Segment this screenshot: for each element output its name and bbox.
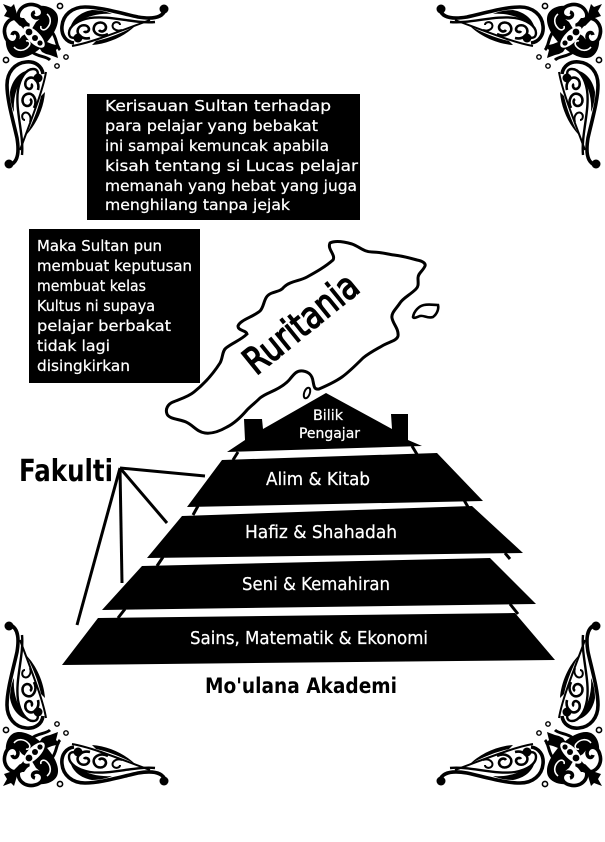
heading: Fakulti: Fakulti [19, 454, 113, 489]
text panel: Sultan's concern: menghilang tanpa jejak [105, 196, 290, 214]
text panel: Sultan's concern: memanah yang hebat yang juga [105, 177, 357, 195]
roof: Bilik Pengajar: Pengajar [299, 426, 360, 442]
text panel: Sultan's concern: para pelajar yang bebakat [105, 117, 318, 135]
text panel: Sultan's concern: Kerisauan Sultan terhadap [105, 97, 331, 115]
roof: Bilik Pengajar: Bilik [313, 408, 344, 424]
pyramid: Mo'ulana Akademi tiers [62, 393, 555, 665]
corner ornament: bottom left [3, 622, 168, 787]
text panel: Sultan's decision [29, 229, 200, 383]
tier 3: Seni & Kemahiran [242, 574, 390, 595]
tier 4: Sains, Matematik & Ekonomi [190, 628, 428, 649]
text panel: Sultan's decision: Maka Sultan pun [37, 237, 162, 255]
corner ornament: bottom right [436, 622, 602, 787]
text panel: Sultan's concern: kisah tentang si Lucas pelajar [105, 157, 359, 175]
text panel: Sultan's decision: Kultus ni supaya [37, 297, 155, 315]
map: Ruritania island [166, 241, 438, 433]
tier 2: Hafiz & Shahadah [245, 522, 397, 543]
tier 4 [62, 613, 555, 665]
corner ornament: top right [436, 3, 602, 169]
tier 1 [187, 453, 483, 507]
text panel: Sultan's decision: tidak lagi [37, 337, 110, 355]
text panel: Sultan's decision: disingkirkan [37, 357, 130, 375]
text panel: Sultan's concern: ini sampai kemuncak apabila [105, 137, 329, 155]
text panel: Sultan's concern [87, 94, 360, 220]
text panel: Sultan's decision: pelajar berbakat [37, 317, 171, 335]
text panel: Sultan's decision: membuat kelas [37, 277, 146, 295]
corner ornament: top left [3, 3, 168, 169]
caption: Mo'ulana Akademi: Mo'ulana Akademi [205, 674, 397, 698]
tier 1: Alim & Kitab [266, 469, 370, 490]
small islet south [302, 387, 312, 399]
callout lines from Fakulti [77, 468, 205, 625]
pyramid connector legs [118, 446, 518, 618]
tier 3 [102, 558, 536, 610]
tier 2 [147, 506, 523, 558]
island label: Ruritania [235, 264, 367, 383]
small island east [413, 305, 438, 318]
text panel: Sultan's decision: membuat keputusan [37, 257, 192, 275]
roof: Bilik Pengajar [227, 393, 422, 452]
